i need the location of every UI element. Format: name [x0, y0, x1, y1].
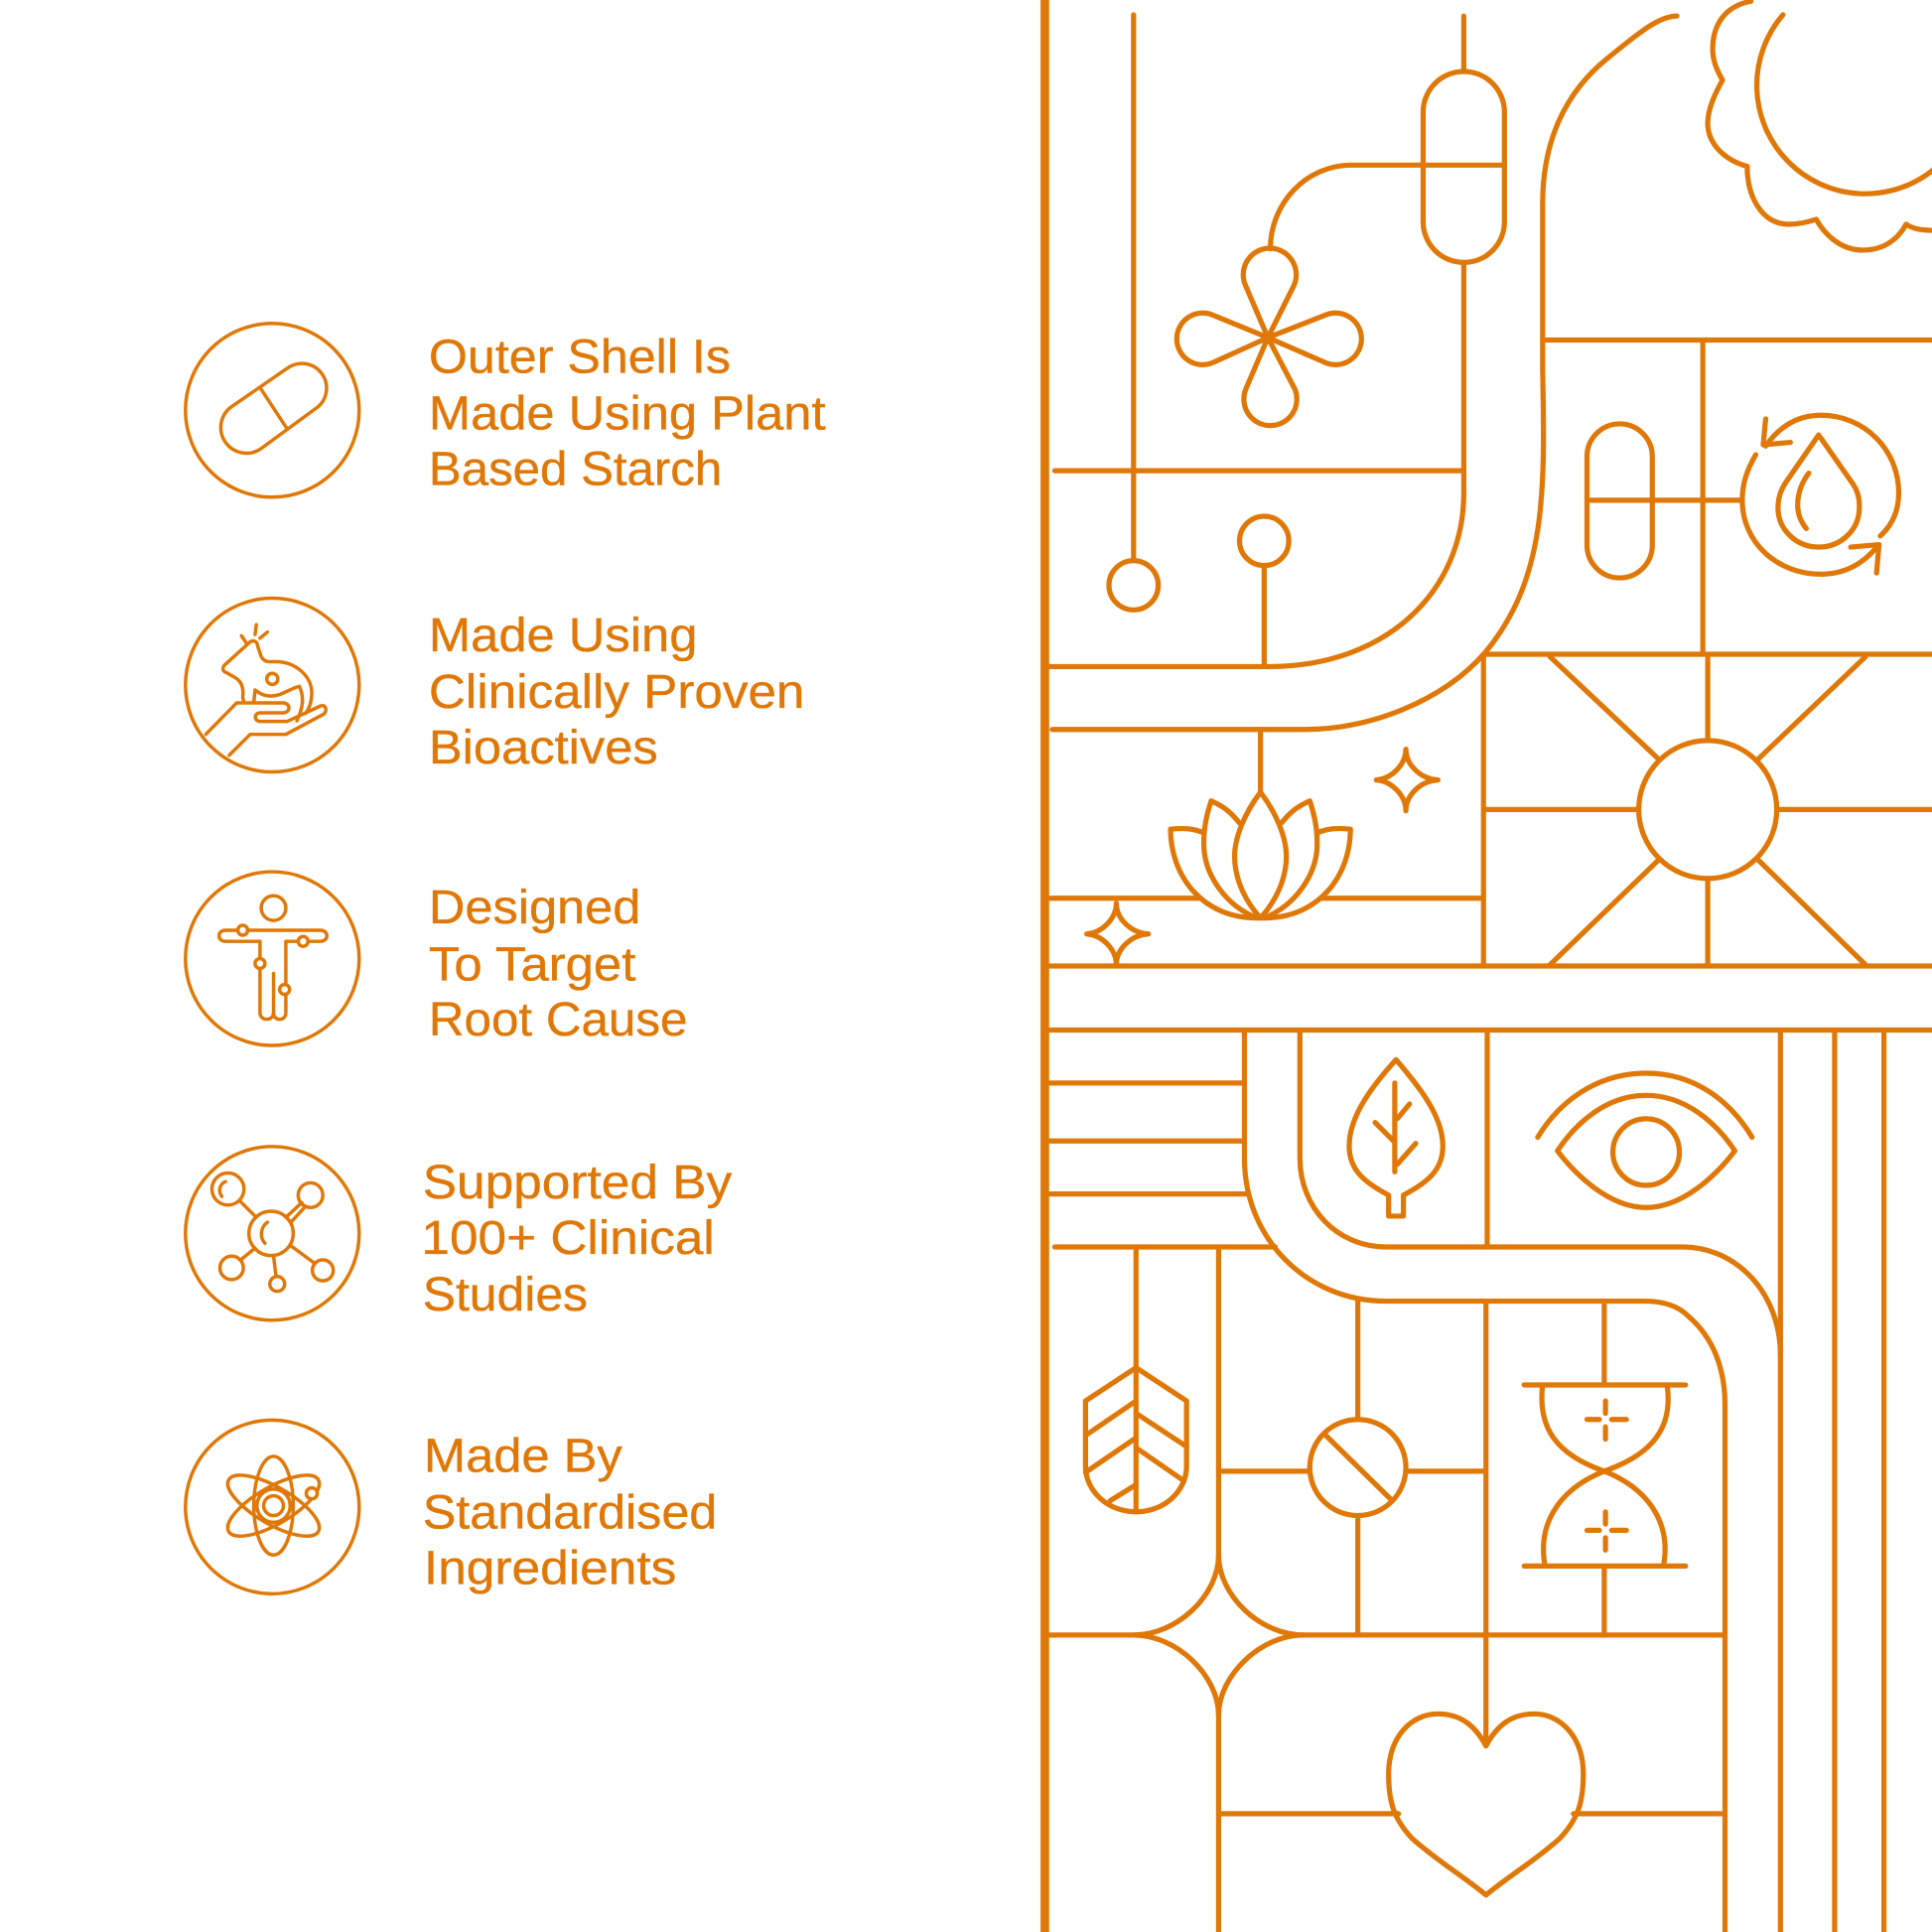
icon: sparkle left	[1087, 903, 1149, 965]
icon: no sign circle	[1218, 1302, 1483, 1635]
text: ingredients: Ingredients	[424, 1541, 676, 1594]
feature: clinical studies	[186, 1147, 733, 1321]
horizontal band	[1049, 966, 1932, 1031]
left border line	[1041, 0, 1048, 1932]
text: bioactives: Bioactives	[429, 721, 658, 774]
pin with circle: tall	[1109, 15, 1159, 610]
icon: sparkle right	[1376, 750, 1438, 811]
text: ingredients	[423, 1429, 717, 1594]
flowing curve: upper channel	[1052, 16, 1677, 730]
feature: plant based shell	[186, 324, 826, 497]
icon: molecule network	[186, 1147, 359, 1320]
icon: flower with connector	[1176, 165, 1504, 426]
feature: target root cause	[186, 872, 688, 1046]
text: clinical studies: 100+ Clinical	[421, 1211, 715, 1265]
text: bioactives	[429, 609, 804, 774]
icon: hourglass	[1524, 1302, 1686, 1635]
text: bioactives: Made Using	[429, 609, 697, 662]
icon: capsule with stem	[1049, 16, 1504, 666]
icon: water drop recycle	[1742, 415, 1898, 574]
icon: crescent moon with cloud	[1708, 1, 1932, 250]
text: clinical studies: Studies	[423, 1268, 588, 1321]
text: root cause: To Target	[429, 937, 636, 991]
text: outer shell: Made Using Plant	[429, 387, 826, 441]
four point star junction	[1047, 1247, 1725, 1932]
panel: feature list	[186, 324, 826, 1594]
text: root cause: Root Cause	[429, 993, 688, 1046]
shelf line	[1054, 469, 1463, 473]
text: clinical studies: Supported By	[423, 1156, 733, 1209]
icon: human body with markers	[186, 872, 359, 1045]
text: outer shell: Outer Shell Is	[429, 330, 731, 383]
text: outer shell	[429, 330, 826, 495]
feature: clinically proven bioactives	[186, 599, 804, 774]
icon: eye	[1538, 1073, 1752, 1207]
icon: flask in hand	[186, 599, 359, 772]
text: ingredients: Standardised	[423, 1486, 717, 1540]
icon: capsule on line	[1587, 424, 1742, 578]
icon: sun with rays	[1484, 654, 1932, 965]
text: clinical studies	[421, 1156, 733, 1321]
pin with circle: short	[1240, 516, 1289, 666]
text: root cause: Designed	[429, 881, 640, 934]
icon: atom	[186, 1420, 359, 1593]
icon: feather	[1085, 1247, 1186, 1512]
feature: standardised ingredients	[186, 1420, 717, 1594]
flowing curve: lower channel	[1244, 1031, 1780, 1932]
text: bioactives: Clinically Proven	[429, 665, 804, 719]
icon: lotus	[1048, 730, 1482, 918]
panel: line art	[1044, 0, 1932, 1932]
text: root cause	[429, 881, 688, 1046]
icon: leaf	[1349, 1059, 1443, 1216]
vertical stripes and dividers	[1049, 1031, 1884, 1932]
icon: capsule	[186, 324, 359, 497]
icon: heart on stem	[1218, 1302, 1722, 1895]
upper right grid	[1483, 341, 1932, 965]
text: outer shell: Based Starch	[429, 442, 722, 495]
text: ingredients: Made By	[424, 1429, 623, 1482]
